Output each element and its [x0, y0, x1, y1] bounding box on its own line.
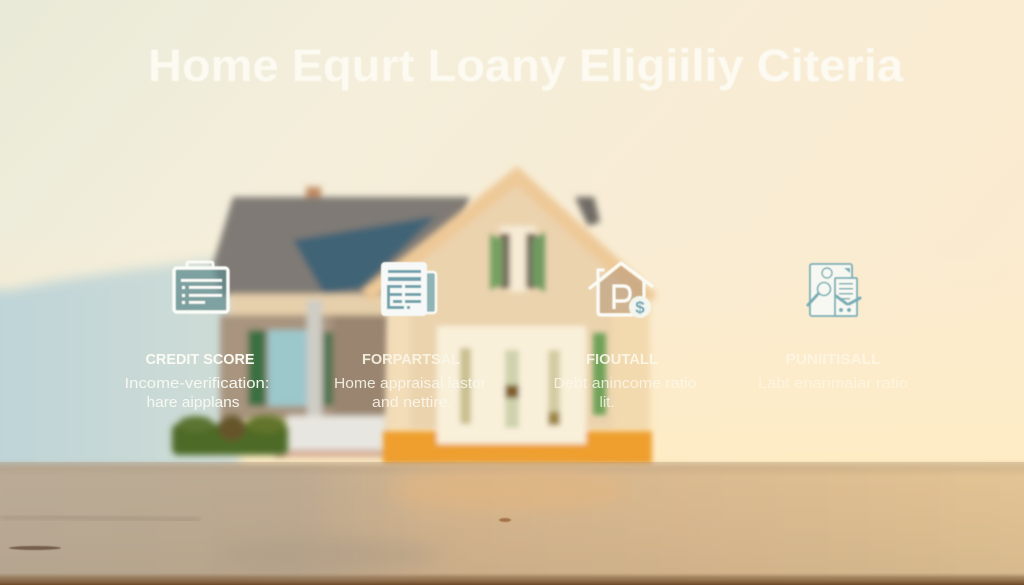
shrubs: [172, 415, 288, 455]
description: debt income ratio: [554, 376, 696, 411]
gable window: [490, 226, 545, 292]
column: credit score: [124, 262, 270, 411]
orange base and door: [383, 326, 652, 465]
wooden table: [0, 462, 1024, 585]
description: credit score: hare aipplans: [146, 395, 240, 411]
description: labt enarimalar ratio: Labt enarimalar ratio: [758, 376, 908, 392]
column: puniitisall: [758, 264, 908, 392]
description: debt income ratio: Debt anincome ratio: [554, 376, 696, 392]
description: debt income ratio: lit.: [600, 395, 614, 411]
column: fioutall: [554, 263, 696, 411]
description: appraisal: Home appraisal lastor: [334, 376, 486, 392]
title: Home Equrt Loany Eligiiliy Citeria: [148, 40, 904, 91]
left wing of house: [213, 187, 470, 457]
icon: documents: [381, 262, 436, 316]
heading: forpartsal: FORPARTSAL: [362, 352, 460, 368]
description: appraisal: and nettire.: [372, 395, 452, 411]
heading: puniitisall: PUNIITISALL: [786, 352, 881, 368]
column: appraisal: [334, 262, 486, 411]
icon: house with dollar coin: [590, 263, 652, 318]
main gable section: [366, 176, 652, 430]
heading: fioutall: FIOUTALL: [586, 352, 658, 368]
description: appraisal: [334, 376, 486, 411]
description: credit score: Income-verification:: [124, 376, 270, 392]
heading: credit score: CREDIT SCORE: [146, 352, 255, 368]
icon: house with dollar coin: $: [635, 298, 645, 317]
description: credit score: [124, 376, 270, 411]
illustration: blurred house: [172, 176, 652, 465]
icon: papers and magnifier: [808, 264, 860, 316]
icon: clipboard card: [174, 262, 228, 312]
